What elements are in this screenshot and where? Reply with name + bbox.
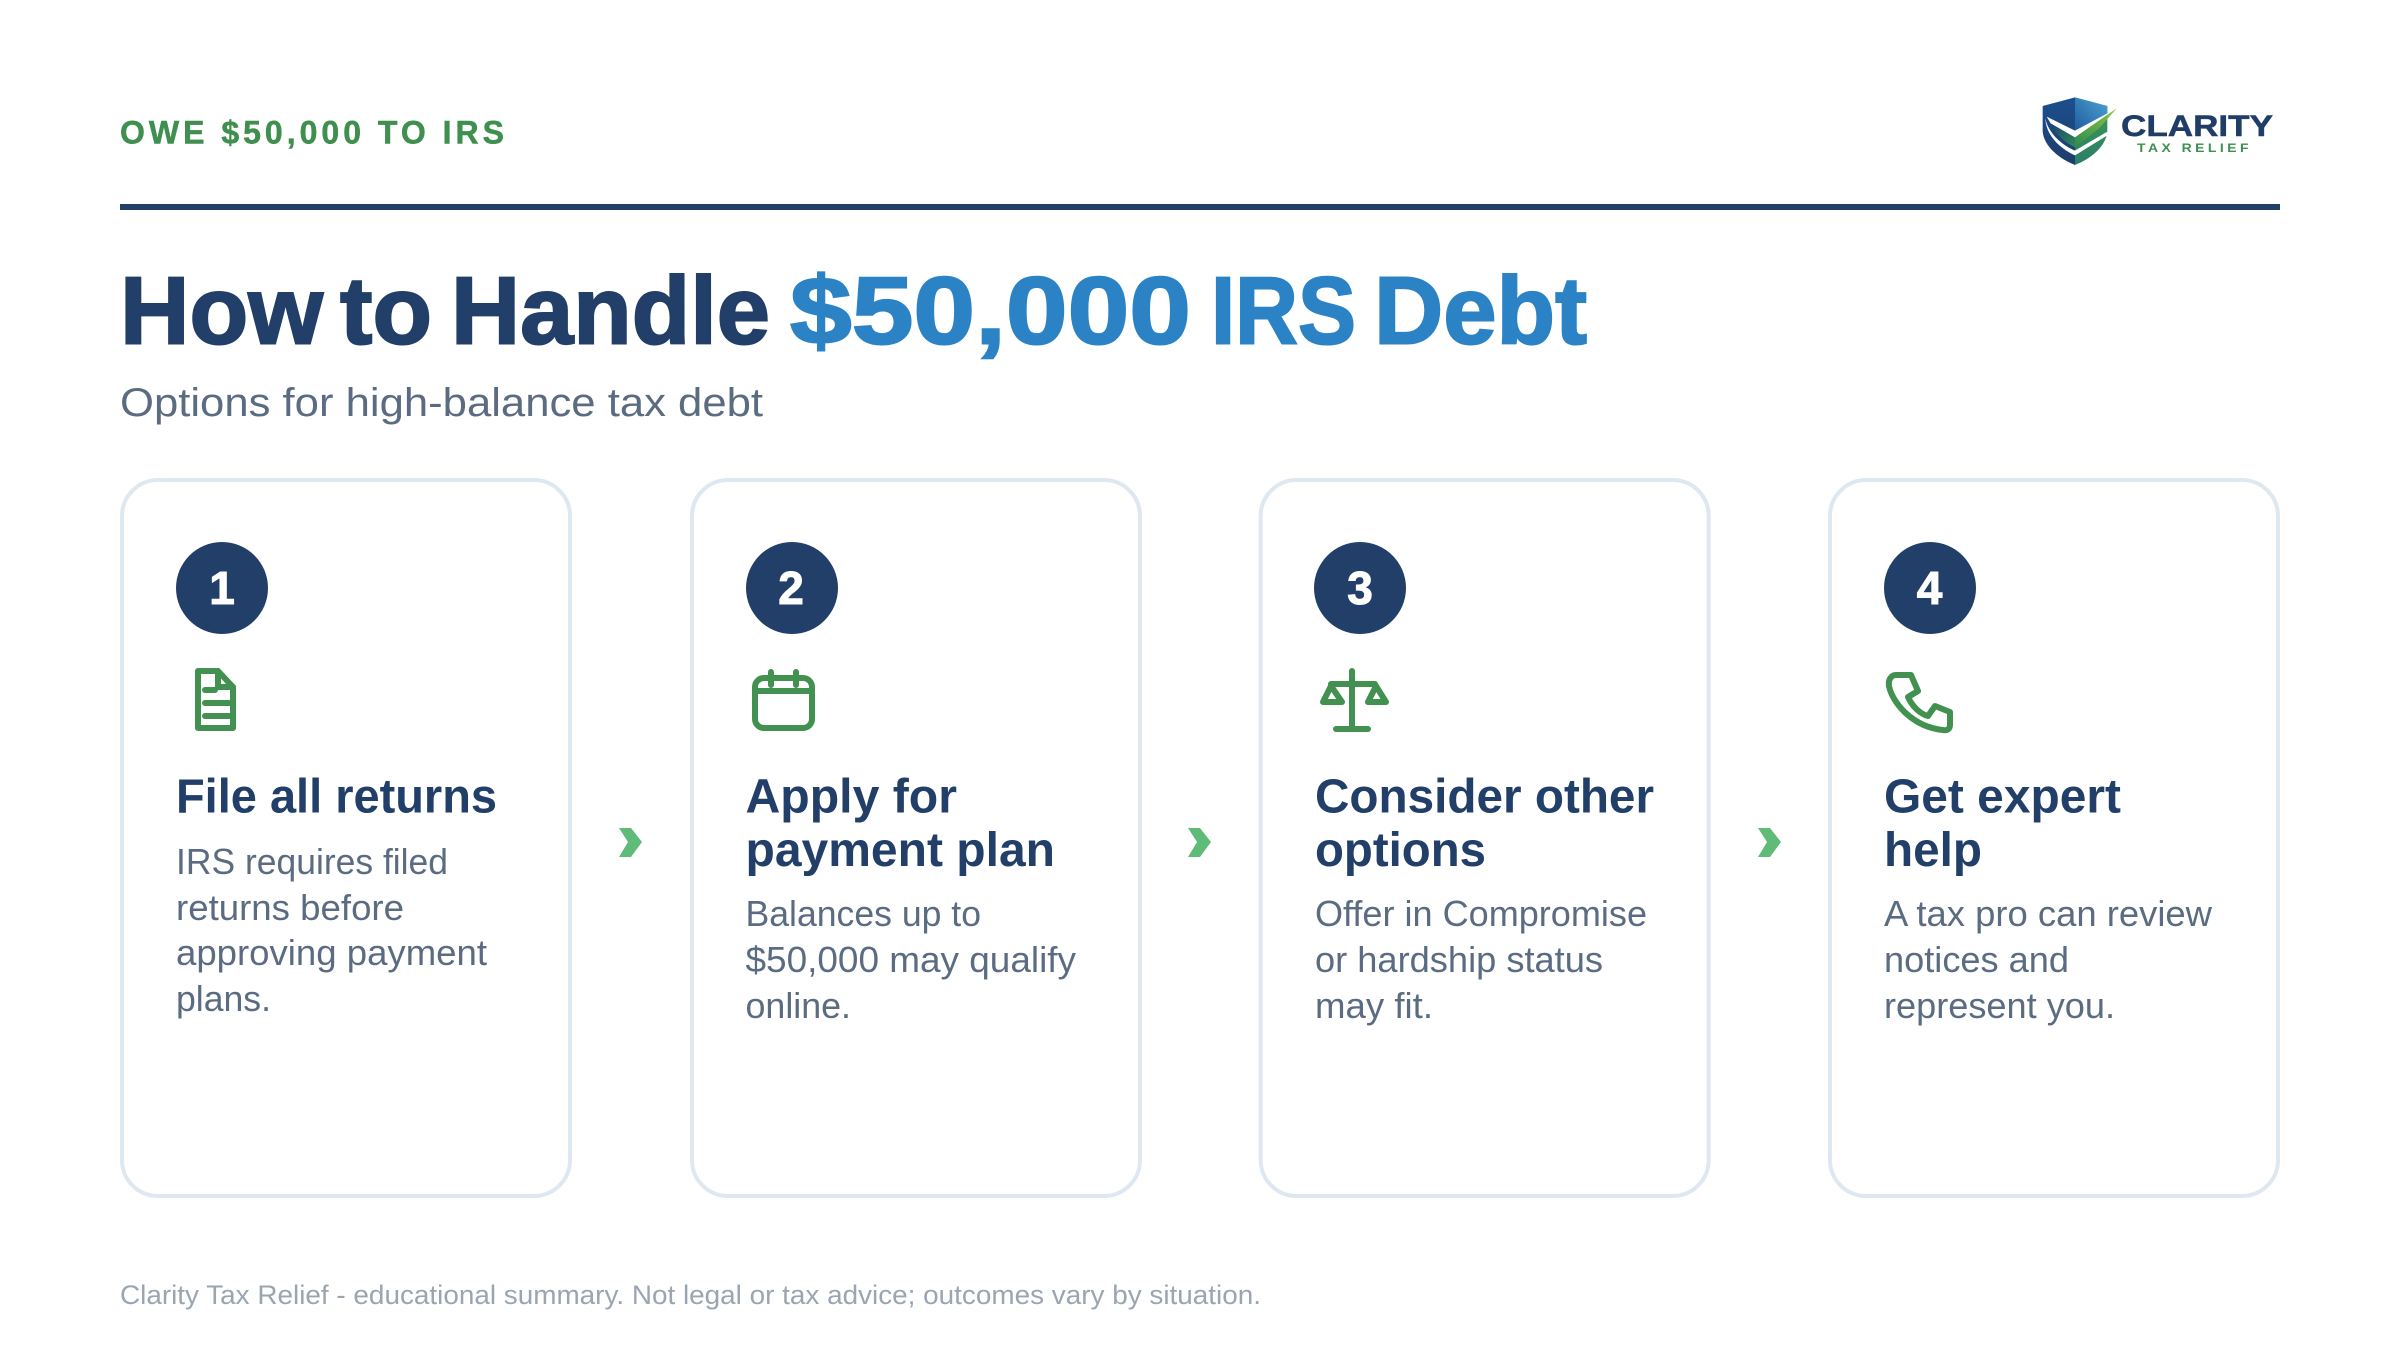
step 4 heading: help [1884,824,1982,877]
step 2 heading: payment plan [746,824,1055,877]
step number 3: 3 [1347,562,1373,614]
subtitle: Options for high-balance tax debt [120,381,763,425]
step number 3 [1314,542,1406,634]
logo: Clarity Tax Relief [2043,97,2273,165]
step 3 heading: options [1315,824,1486,877]
arrow 2 [1188,828,1211,857]
step 4 heading: Get expert [1884,770,2121,824]
title: IRS [1211,258,1356,364]
step 3 body: or hardship status [1315,939,1603,980]
title: to [340,258,432,364]
panel: step 3 consider other options [1261,480,1709,1196]
step 3 body: may fit. [1315,985,1433,1026]
step 1 body [176,841,487,1019]
logo tagline: TAX RELIEF [2137,141,2252,155]
step 1 body: plans. [176,978,271,1019]
icon: telephone [1889,675,1950,730]
panel: step 1 file all returns [122,480,570,1196]
step 1 heading: File all returns [176,770,497,824]
icon: balance scales [1323,671,1386,729]
eyebrow label: OWE $50,000 TO IRS [120,114,508,150]
icon: calendar [755,672,812,728]
step number 4 [1884,542,1976,634]
step number 1 [176,542,268,634]
step 3 body: Offer in Compromise [1315,893,1647,934]
footer disclaimer: Clarity Tax Relief - educational summary. Not legal or tax advice; outcomes vary by situation. [120,1280,1261,1310]
step number 4: 4 [1917,562,1943,614]
step 1 body: returns before [176,887,404,928]
step 2 body: $50,000 may qualify [746,939,1076,980]
title: Debt [1374,258,1587,364]
title: How [120,258,323,364]
title [120,258,1587,364]
arrow 3 [1758,828,1781,857]
step 1 body: approving payment [176,932,487,973]
step number 2: 2 [778,562,804,614]
step 2 body: online. [746,985,851,1026]
step 4 body: notices and [1884,939,2069,980]
title: $50,000 [790,258,1191,364]
step 4 body: A tax pro can review [1884,893,2213,934]
step 3 heading [1315,770,1654,877]
step 2 body [746,893,1076,1026]
logo wordmark: CLARITY [2121,110,2273,143]
step 4 heading [1884,770,2121,877]
icon: document [198,671,233,728]
step 2 heading [746,770,1055,877]
step 1 body: IRS requires filed [176,841,448,882]
step 4 body [1884,893,2213,1026]
panel: step 2 apply for payment plan [692,480,1140,1196]
step 2 heading: Apply for [746,770,957,824]
step 2 body: Balances up to [746,893,981,934]
icon: shield with check [2043,97,2117,165]
arrow 1 [619,828,642,857]
step 4 body: represent you. [1884,985,2115,1026]
step number 2 [746,542,838,634]
title: Handle [451,258,770,364]
panel: step 4 get expert help [1830,480,2278,1196]
step 3 heading: Consider other [1315,770,1654,824]
step number 1: 1 [209,562,235,614]
step 3 body [1315,893,1647,1026]
